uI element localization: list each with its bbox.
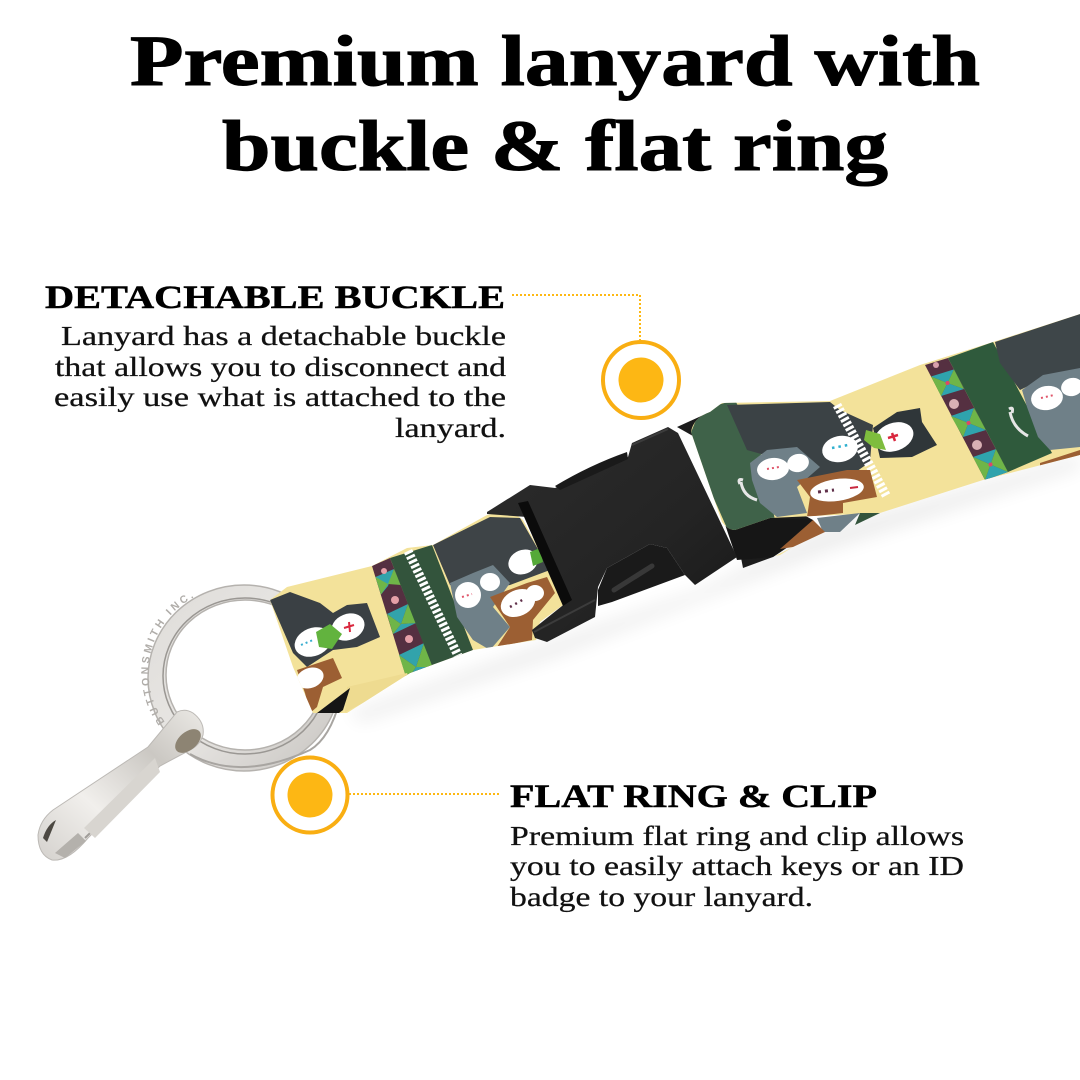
- strap inner lower flap: [345, 673, 410, 712]
- description: Premium flat ring and clip allows: [510, 821, 964, 851]
- heading: FLAT RING & CLIP: [510, 779, 877, 815]
- connector line: [349, 793, 500, 795]
- marker: [603, 342, 679, 418]
- right grey cat: [1022, 368, 1080, 450]
- green stripe: [948, 342, 1052, 472]
- tuxedo cat head: [873, 408, 937, 458]
- tuxedo cat: [270, 592, 380, 667]
- description: you to easily attach keys or an ID: [510, 851, 964, 881]
- title: Premium lanyard with: [130, 21, 980, 101]
- small grey cat: [750, 447, 820, 517]
- buckle: male rear tongue: [677, 412, 813, 568]
- lanyard strap: lower section: [270, 514, 562, 713]
- green stripe: [390, 545, 473, 668]
- quilt stripe: [925, 358, 1008, 480]
- green left fold: [688, 400, 775, 535]
- grey-black cat: [433, 517, 548, 586]
- small brown cat: [297, 658, 342, 713]
- swivel clip: [38, 710, 205, 860]
- callout: flat ring and clip: [272, 758, 964, 912]
- callout: detachable buckle: [45, 280, 679, 443]
- description: Lanyard has a detachable buckle: [61, 321, 506, 351]
- brown hint at bottom right: [1040, 450, 1080, 466]
- quilt stripe: [372, 558, 433, 680]
- brown cat: [797, 470, 877, 517]
- description: [54, 321, 507, 443]
- connector line: [512, 295, 640, 340]
- description: that allows you to disconnect and: [55, 352, 507, 382]
- flat key ring: [141, 584, 337, 772]
- soft shadow under lanyard: [350, 455, 1080, 722]
- description: lanyard.: [395, 413, 506, 443]
- description: badge to your lanyard.: [510, 882, 813, 912]
- description: [510, 821, 964, 912]
- description: easily use what is attached to the: [54, 382, 506, 412]
- grey cat: [450, 565, 510, 650]
- brown cat: [490, 577, 555, 647]
- buckle: main body: [487, 427, 737, 642]
- marker: [272, 758, 348, 832]
- right dark cat: [995, 314, 1080, 390]
- flat key ring: BUTTONSMITH INC.: [141, 595, 194, 726]
- infographic canvas: [38, 34, 1080, 912]
- under-strap tail: [775, 513, 880, 556]
- tuxedo cat body: [727, 402, 873, 485]
- title: [130, 21, 980, 186]
- lanyard strap: upper section: [691, 314, 1080, 530]
- title: buckle & flat ring: [222, 106, 888, 186]
- heading: DETACHABLE BUCKLE: [45, 280, 505, 316]
